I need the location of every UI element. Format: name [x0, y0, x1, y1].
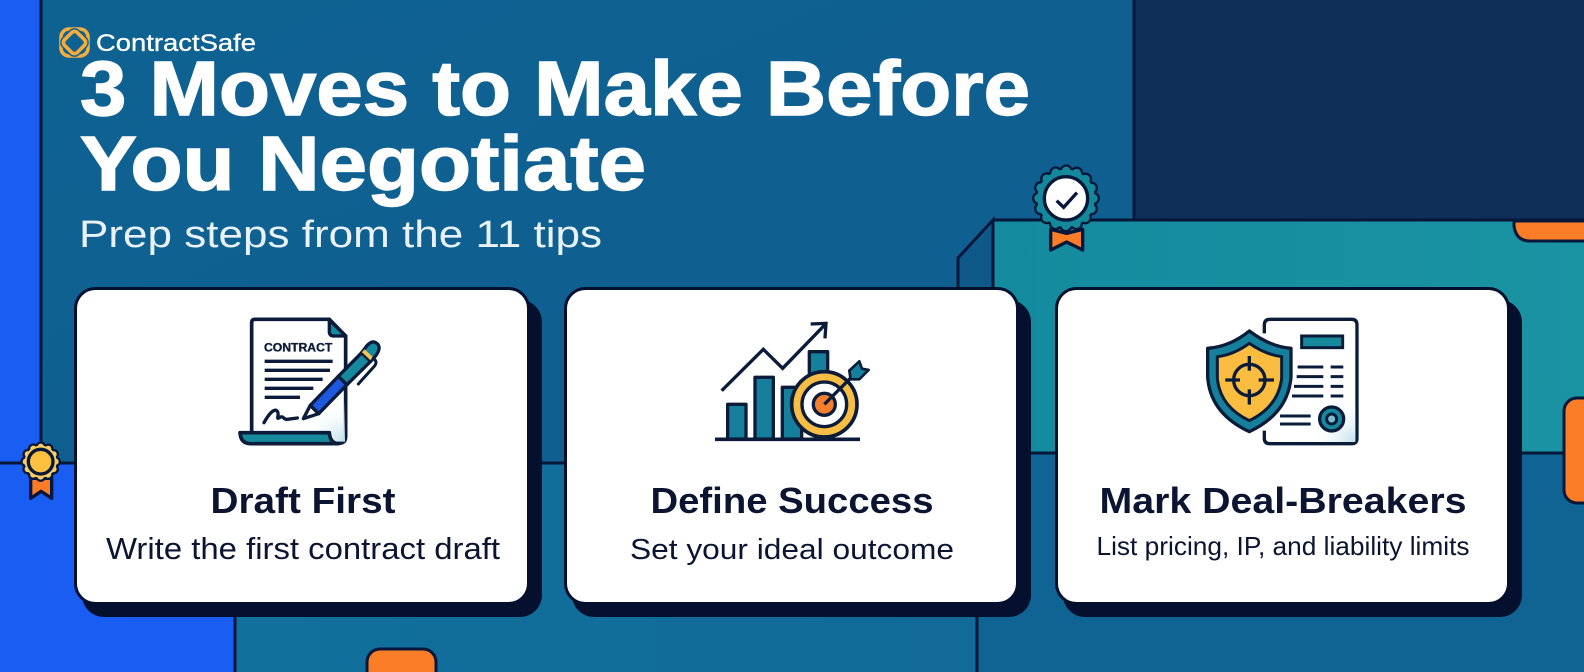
icon: contract and pen: CONTRACT: [264, 342, 332, 355]
logo: ContractSafe: [61, 29, 256, 57]
card shadow: [82, 300, 542, 617]
panel: Define Success: [566, 288, 1031, 617]
panel: Mark Deal-Breakers: [1056, 288, 1522, 617]
description: Write the first contract draft: [106, 531, 500, 566]
card body: [566, 288, 1018, 604]
icon: growth chart and target: [715, 323, 869, 439]
subtitle: Prep steps from the 11 tips: [79, 214, 602, 256]
panel: Draft First: [76, 288, 542, 617]
accent: orange tab right: [1564, 398, 1584, 503]
icon: logo mark: [61, 29, 88, 56]
card shadow: [1063, 300, 1522, 617]
heading: Define Success: [650, 480, 934, 521]
heading: Draft First: [210, 480, 396, 521]
card body: [76, 288, 528, 604]
description: Set your ideal outcome: [630, 534, 954, 566]
icon: shield and document: [1208, 319, 1357, 444]
icon: contract and pen: [240, 319, 379, 444]
accent: orange tab top right: [1514, 221, 1584, 241]
card shadow: [572, 300, 1031, 617]
title: 3 Moves to Make Before: [80, 46, 1030, 132]
description: List pricing, IP, and liability limits: [1096, 531, 1470, 561]
title: You Negotiate: [80, 121, 646, 207]
heading: Mark Deal-Breakers: [1100, 480, 1466, 521]
card body: [1056, 288, 1508, 604]
logo wordmark: ContractSafe: [96, 30, 256, 57]
badge: gold ribbon: [25, 446, 57, 498]
title: [80, 46, 1030, 207]
badge: checkmark ribbon: [1037, 170, 1095, 250]
accent: orange tab bottom: [367, 649, 436, 672]
